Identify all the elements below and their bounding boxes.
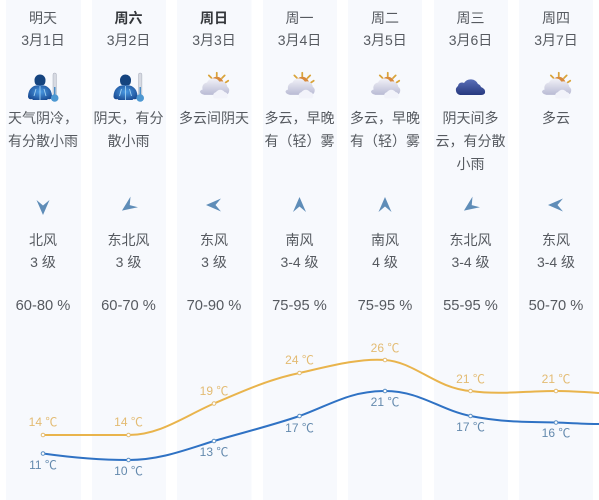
high temperature line: 21 ℃ (542, 372, 570, 386)
weather description: 云，有分散 (436, 133, 506, 149)
panel: day 7 forecast (519, 0, 593, 500)
icon: cold rain (28, 73, 58, 102)
high temperature line: 14 ℃ (29, 415, 57, 429)
low temperature line: 17 ℃ (456, 420, 485, 434)
panel: day 6 forecast (434, 0, 508, 500)
weather description: 有（轻）雾 (264, 133, 334, 149)
humidity: 60-70 % (101, 298, 156, 314)
high temperature line: 19 ℃ (200, 384, 228, 398)
day heading: 周四 (542, 10, 570, 26)
humidity: 55-95 % (443, 298, 498, 314)
low temperature line: 21 ℃ (371, 395, 399, 409)
icon: wind arrow east (548, 198, 563, 212)
weather description: 多云，早晚 (350, 110, 420, 126)
weather description: 阴天间多 (442, 110, 498, 126)
icon: wind arrow south (293, 197, 306, 212)
panel: day 2 forecast (92, 0, 166, 500)
date: 3月7日 (534, 32, 578, 48)
wind direction and level: 3-4 级 (451, 254, 490, 270)
weather description: 有分散小雨 (8, 133, 78, 149)
icon: cold rain (114, 73, 144, 102)
high temperature line: 26 ℃ (371, 341, 399, 355)
wind direction and level: 东北风 (108, 232, 150, 248)
day heading: 周日 (200, 10, 228, 26)
weather description: 多云间阴天 (179, 110, 249, 126)
high temperature line: 24 ℃ (285, 353, 314, 367)
icon: wind arrow south (378, 197, 392, 212)
low temperature line (29, 389, 599, 478)
weather description: 散小雨 (108, 133, 150, 149)
panel: day 3 forecast (177, 0, 252, 500)
date: 3月1日 (21, 32, 65, 48)
weather description: 多云 (542, 110, 570, 126)
wind direction and level: 4 级 (372, 254, 398, 270)
high temperature line: 21 ℃ (456, 372, 485, 386)
wind direction and level: 3-4 级 (280, 254, 319, 270)
wind direction and level: 东风 (542, 232, 570, 248)
wind direction and level: 南风 (286, 232, 314, 248)
day heading: 周六 (114, 10, 142, 26)
weather description: 有（轻）雾 (350, 133, 420, 149)
day heading: 明天 (29, 10, 57, 26)
icon: sun behind cloud (200, 73, 229, 98)
humidity: 60-80 % (16, 298, 70, 314)
panel: day 4 forecast (263, 0, 337, 500)
weather description: 阴天，有分 (94, 110, 164, 126)
wind direction and level: 3 级 (201, 254, 227, 270)
date: 3月6日 (449, 32, 492, 48)
date: 3月3日 (192, 32, 236, 48)
date: 3月2日 (107, 32, 150, 48)
icon: wind arrow north (36, 200, 50, 215)
weather description: 多云，早晚 (264, 110, 334, 126)
wind direction and level: 3 级 (116, 254, 141, 270)
wind direction and level: 北风 (29, 232, 57, 248)
wind direction and level: 3 级 (30, 254, 56, 270)
wind direction and level: 东北风 (450, 232, 492, 248)
humidity: 70-90 % (187, 298, 241, 314)
icon: sun behind cloud (371, 73, 400, 98)
day heading: 周二 (371, 10, 399, 26)
wind direction and level: 东风 (200, 232, 228, 248)
icon: sun behind cloud (286, 73, 315, 98)
line chart: daily temperatures (29, 341, 599, 478)
low temperature line: 16 ℃ (542, 426, 570, 440)
humidity: 50-70 % (529, 298, 583, 314)
weather description: 小雨 (456, 156, 484, 172)
icon: dark cloud (456, 79, 485, 95)
humidity: 75-95 % (272, 298, 327, 314)
high temperature line: 14 ℃ (114, 415, 143, 429)
date: 3月4日 (278, 32, 321, 48)
low temperature line: 10 ℃ (114, 464, 143, 478)
humidity: 75-95 % (358, 298, 412, 314)
wind direction and level: 南风 (371, 232, 399, 248)
icon: sun behind cloud (542, 73, 571, 98)
low temperature line: 17 ℃ (285, 421, 314, 435)
icon: wind arrow east (206, 198, 221, 212)
wind direction and level: 3-4 级 (537, 254, 575, 270)
high temperature line (29, 341, 599, 437)
panel: day 1 forecast (6, 0, 81, 500)
panel: day 5 forecast (348, 0, 422, 500)
date: 3月5日 (363, 32, 407, 48)
day heading: 周一 (286, 10, 314, 26)
icon: wind arrow northeast (460, 197, 480, 216)
icon: wind arrow northeast (118, 197, 138, 216)
low temperature line: 11 ℃ (29, 458, 57, 472)
day heading: 周三 (456, 10, 484, 26)
weather description: 天气阴冷， (8, 110, 78, 126)
low temperature line: 13 ℃ (200, 445, 228, 459)
